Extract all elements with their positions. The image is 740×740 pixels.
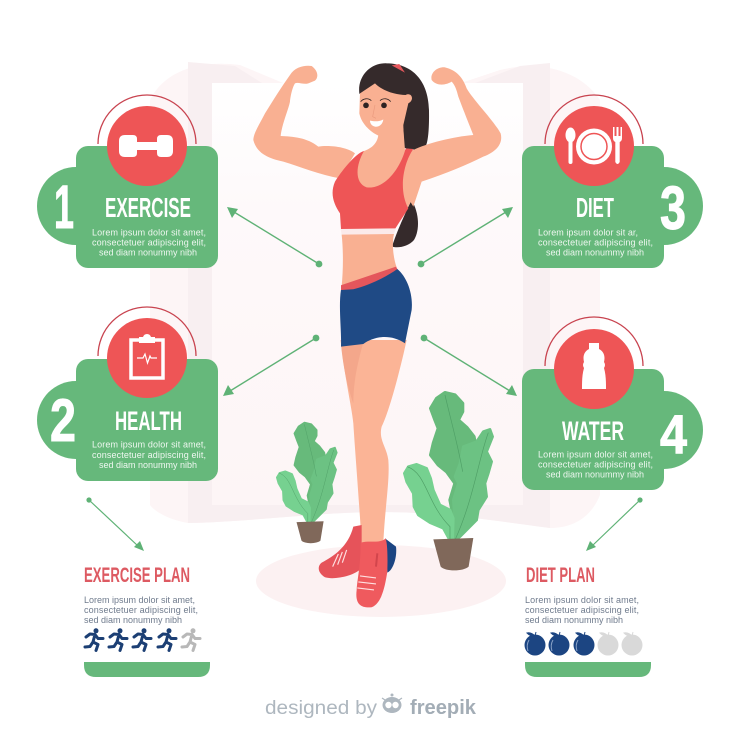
icon: water bottle bbox=[582, 343, 606, 389]
icon: dumbbell bbox=[119, 135, 173, 157]
footer credit: freepik bbox=[410, 697, 477, 719]
heading: exercise: EXERCISE bbox=[105, 192, 191, 223]
body text: water: Lorem ipsum dolor sit amet, bbox=[538, 450, 653, 460]
body text: exercise: Lorem ipsum dolor sit amet, bbox=[92, 228, 206, 238]
icon row: runners bbox=[85, 628, 200, 650]
arrow: health to exercise plan bbox=[86, 497, 144, 551]
upper body bbox=[253, 63, 501, 347]
body text: diet plan: Lorem ipsum dolor sit amet, bbox=[525, 595, 639, 605]
body text: diet plan: sed diam nonummy nibh bbox=[525, 615, 623, 625]
woman flexing bbox=[253, 63, 501, 607]
panel: exercise bbox=[37, 95, 218, 268]
body text: exercise plan: Lorem ipsum dolor sit amet, bbox=[84, 595, 195, 605]
legs and shoes bbox=[319, 340, 407, 607]
body text: exercise: consectetuer adipiscing elit, bbox=[92, 238, 206, 248]
body text: water: consectetuer adipiscing elit, bbox=[538, 460, 653, 470]
panel: diet bbox=[522, 95, 703, 268]
number 2: 2 bbox=[50, 387, 76, 454]
arrow: woman to exercise bbox=[227, 207, 322, 267]
body text: diet: Lorem ipsum dolor sit ar, bbox=[538, 228, 638, 238]
body text: diet: sed diam nonummy nibh bbox=[546, 248, 644, 258]
heading: water: WATER bbox=[562, 416, 624, 446]
large potted plant bbox=[404, 393, 493, 570]
icon: freepik mascot bbox=[382, 694, 402, 713]
body text: health: Lorem ipsum dolor sit amet, bbox=[92, 440, 206, 450]
green bar bbox=[84, 662, 210, 677]
arrow: woman to health bbox=[223, 335, 319, 396]
panel: health bbox=[37, 307, 218, 481]
heading: health: HEALTH bbox=[115, 406, 182, 436]
shorts bbox=[341, 267, 398, 290]
panel: water bbox=[522, 317, 703, 490]
icon: clipboard with heartbeat bbox=[131, 334, 163, 378]
heading: exercise plan: EXERCISE PLAN bbox=[84, 564, 190, 587]
sports top bbox=[333, 148, 413, 229]
number 4: 4 bbox=[660, 403, 687, 465]
heading: diet: DIET bbox=[576, 192, 614, 223]
body text: diet: consectetuer adipiscing elit, bbox=[538, 238, 653, 248]
arrow: water to diet plan bbox=[586, 497, 643, 551]
body text: water: sed diam nonummy nibh bbox=[546, 470, 644, 480]
arrow: woman to diet bbox=[418, 207, 513, 267]
body text: diet plan: consectetuer adipiscing elit, bbox=[525, 605, 639, 615]
icon: plate, spoon and fork bbox=[566, 127, 622, 164]
footer credit bbox=[265, 694, 477, 719]
body text: health: consectetuer adipiscing elit, bbox=[92, 450, 206, 460]
number 3: 3 bbox=[660, 174, 686, 242]
footer credit: designed by bbox=[265, 698, 378, 719]
body text: health: sed diam nonummy nibh bbox=[99, 460, 197, 470]
green bar bbox=[525, 662, 651, 677]
body text: exercise: sed diam nonummy nibh bbox=[99, 248, 197, 258]
small potted plant bbox=[277, 423, 337, 543]
background room bbox=[150, 62, 600, 617]
icon row: apples bbox=[524, 632, 642, 656]
panel: diet plan bbox=[524, 564, 651, 677]
arrow: woman to water bbox=[421, 335, 517, 396]
face bbox=[359, 83, 412, 147]
floor shadow ellipse bbox=[256, 545, 506, 617]
number 1: 1 bbox=[54, 173, 74, 241]
panel: exercise plan bbox=[84, 564, 210, 677]
midriff bbox=[342, 234, 397, 286]
body text: exercise plan: consectetuer adipiscing elit, bbox=[84, 605, 198, 615]
body text: exercise plan: sed diam nonummy nibh bbox=[84, 615, 182, 625]
heading: diet plan: DIET PLAN bbox=[526, 564, 595, 587]
